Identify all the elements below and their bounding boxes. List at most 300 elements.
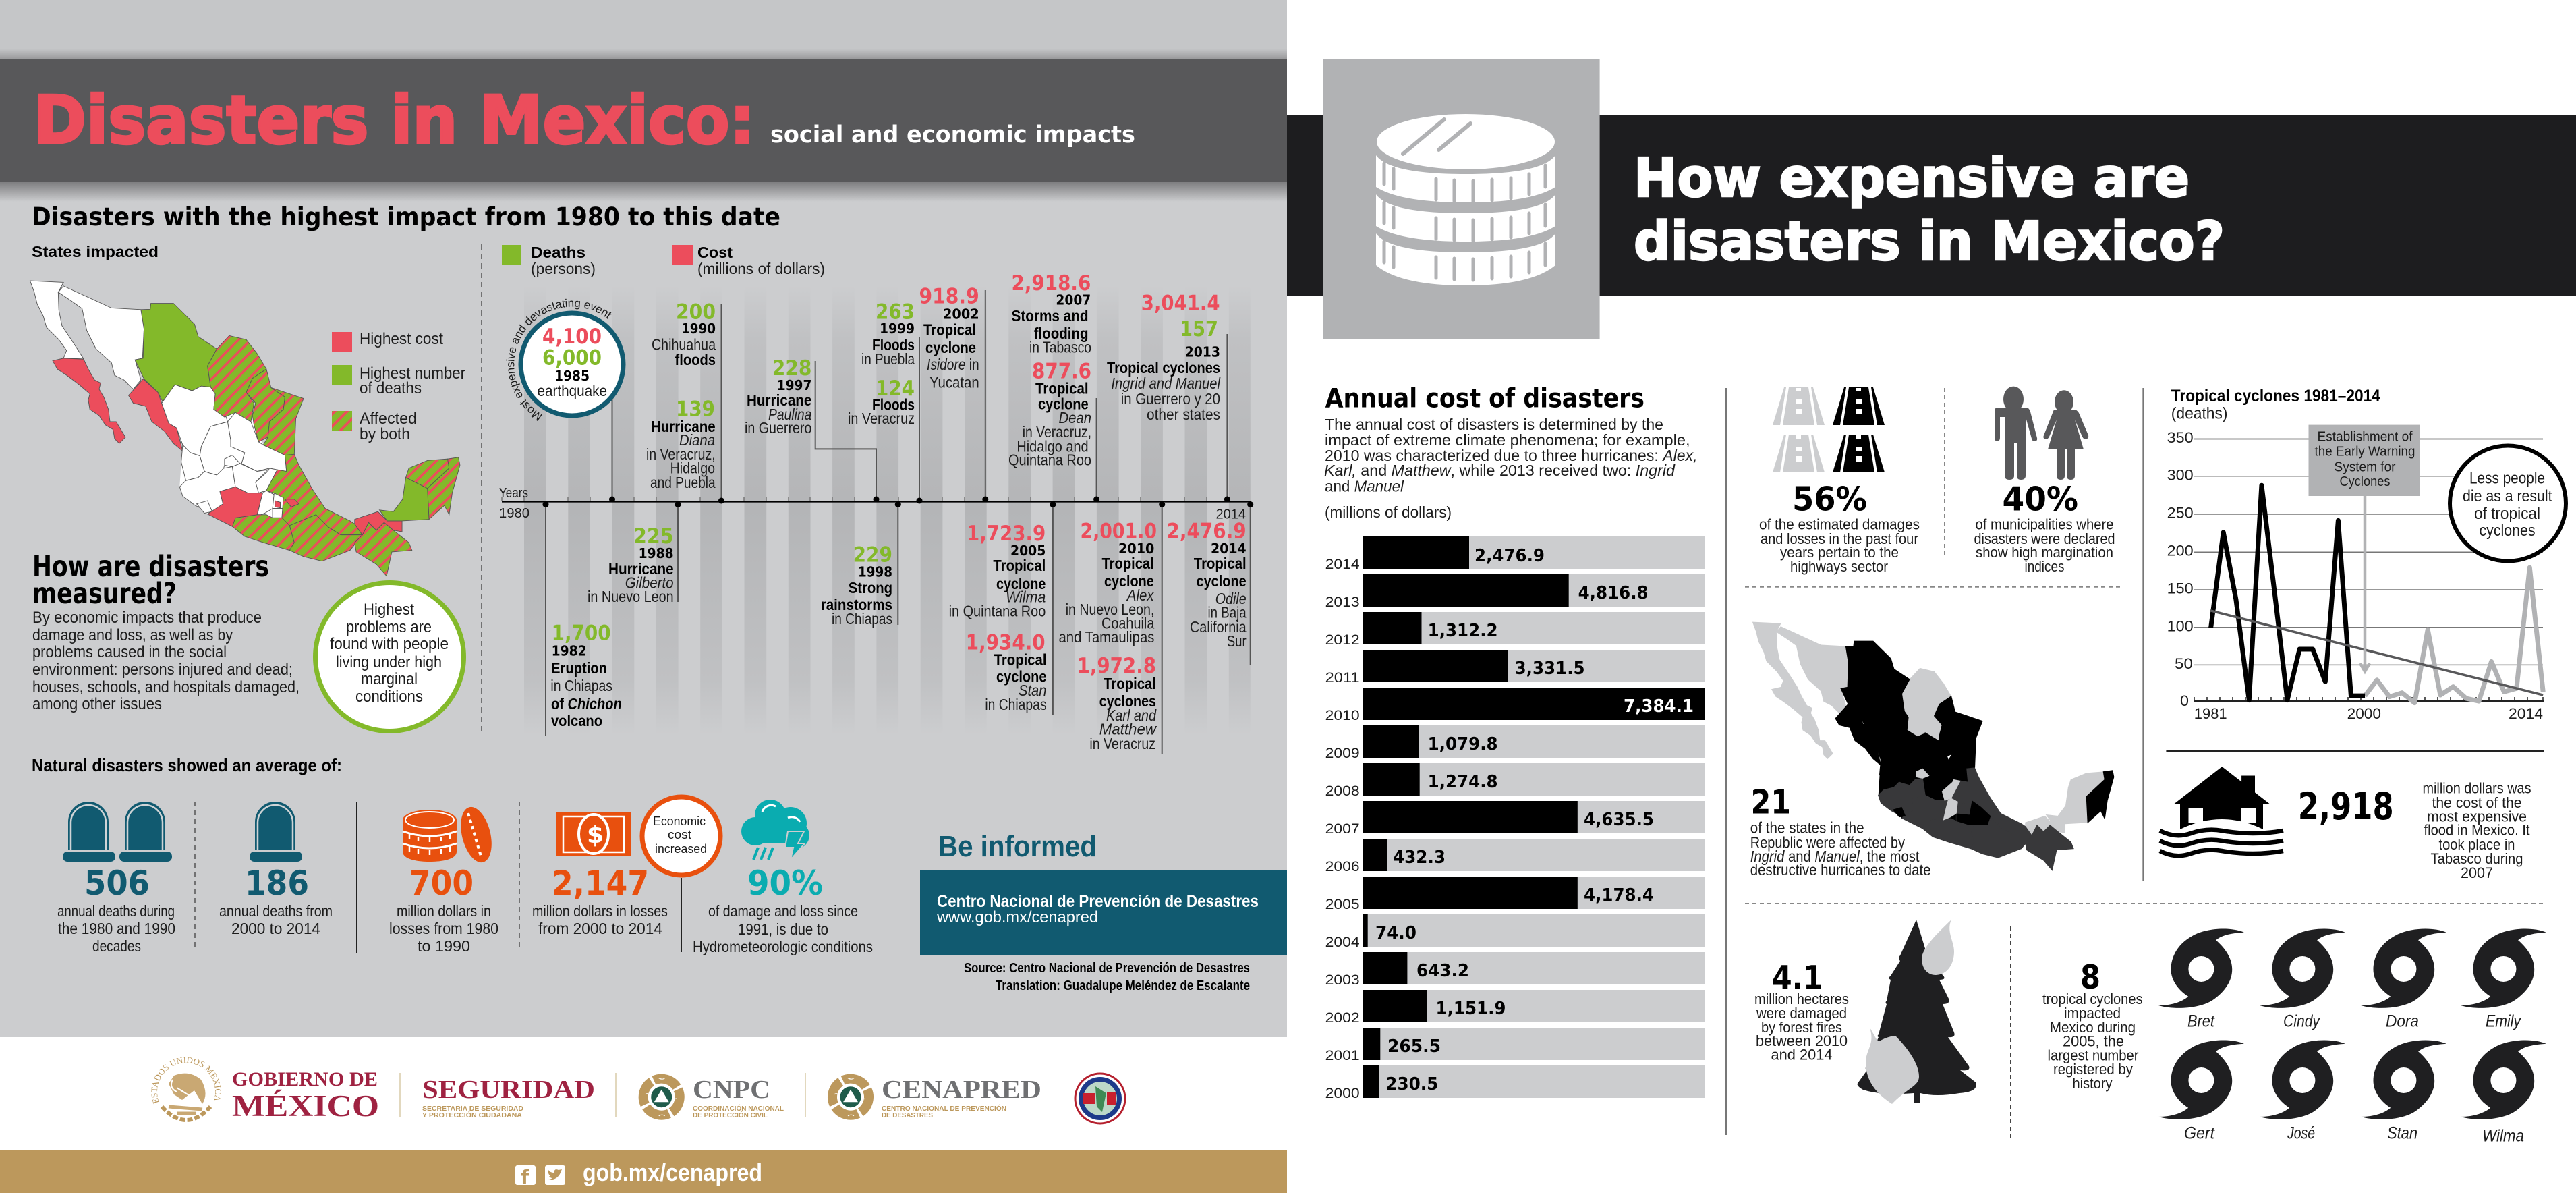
stat: 506 annual deaths: decades bbox=[92, 937, 141, 955]
event: 1988 Hurricane Gilberto: 225 bbox=[633, 524, 674, 549]
timeline legend: (persons) bbox=[531, 260, 596, 277]
event: 1985 earthquake: 1985 bbox=[554, 368, 590, 384]
event: 1988 Hurricane Gilberto: Gilberto bbox=[625, 574, 674, 591]
event: Karl and Matthew: in Veracruz bbox=[1089, 735, 1155, 752]
bar chart: annual cost: 3,331.5 bbox=[1515, 659, 1585, 679]
event: 1997 Hurricane Paulina bbox=[745, 356, 811, 437]
stat: 90% hydrometeorologic: 1991, is due to bbox=[738, 920, 828, 938]
event: 1998 rainstorms Chiapas: 229 bbox=[853, 543, 892, 567]
callout: less people die: cyclones bbox=[2480, 522, 2535, 540]
bar chart: annual cost: 2009 bbox=[1325, 746, 1360, 761]
stat: 700 million dollars: million dollars in bbox=[397, 902, 491, 920]
bar chart: annual cost: 230.5 bbox=[1385, 1074, 1438, 1094]
icons: named cyclones: Dora bbox=[2386, 1012, 2419, 1031]
event: 1997 Hurricane Paulina: 1997 bbox=[777, 377, 811, 393]
logo: Gobierno de Mexico bbox=[151, 1057, 379, 1123]
section heading: Disasters with the highest impact from 1980 to this date bbox=[32, 202, 780, 231]
stat: 21 states: 21 bbox=[1751, 783, 1791, 821]
stat: flood house 2,918: flood in Mexico. It bbox=[2424, 822, 2529, 839]
stat: 186 annual deaths: 186 bbox=[245, 864, 309, 903]
event: 2014 Odile: cyclone bbox=[1197, 572, 1247, 590]
logo: Seguridad bbox=[422, 1076, 595, 1119]
stat: 8 tropical cyclones bbox=[2042, 958, 2143, 1092]
bar chart: annual cost: 2007 bbox=[1325, 821, 1360, 837]
event: 2010 Alex: Alex bbox=[1126, 586, 1155, 604]
logo: CNPC bbox=[637, 1073, 784, 1121]
map: states impacted bbox=[30, 281, 460, 576]
event: 1985 earthquake: Most expensive and devastating event bbox=[506, 298, 611, 421]
annual cost paragraph: impact of extreme climate phenomena; for example, bbox=[1325, 431, 1690, 449]
annual cost paragraph: The annual cost of disasters is determined by the bbox=[1325, 416, 1663, 433]
annual cost paragraph: and Manuel bbox=[1325, 477, 1404, 495]
icons: named cyclones: José bbox=[2287, 1124, 2315, 1143]
chart: tropical cyclones deaths: 200 bbox=[2167, 543, 2194, 559]
event: 2014 Odile: 2014 bbox=[1211, 540, 1247, 557]
event: Karl and Matthew: Matthew bbox=[1099, 721, 1157, 738]
stat: 506 annual deaths: the 1980 and 1990 bbox=[58, 920, 175, 937]
event: 2010 Alex: Coahuila bbox=[1101, 615, 1155, 632]
event: 2014 Odile: Odile bbox=[1215, 590, 1247, 607]
bar chart: annual cost: 2002 bbox=[1325, 1010, 1360, 1026]
header band bbox=[0, 59, 1287, 182]
stat: 2,147 million dollars: $ bbox=[587, 821, 604, 849]
icons: named cyclones: Wilma bbox=[2482, 1127, 2524, 1146]
logo: CNPC: CNPC bbox=[693, 1076, 770, 1104]
stat: 90% hydrometeorologic: of damage and loss since bbox=[708, 902, 858, 920]
logo: Gobierno de Mexico: MÉXICO bbox=[232, 1089, 379, 1123]
bar chart: annual cost: 1,151.9 bbox=[1435, 999, 1506, 1019]
stat: 506 annual deaths: 506 bbox=[84, 864, 150, 903]
map legend: of deaths bbox=[360, 379, 422, 397]
stat: 56% highways: highways sector bbox=[1790, 558, 1888, 575]
stat: 186 annual deaths bbox=[219, 802, 333, 937]
stat: 56% highways bbox=[1759, 387, 1920, 575]
event: 1982 Chichon eruption bbox=[550, 621, 622, 729]
event: 2013 Ingrid and Manuel bbox=[1107, 292, 1221, 423]
event: Dean: Tropical bbox=[1035, 380, 1089, 397]
stat: 21 states: of the states in the bbox=[1750, 819, 1864, 837]
chart: tropical cyclones deaths: 350 bbox=[2167, 429, 2194, 446]
stat: 21 states bbox=[1750, 783, 1930, 879]
logo: CNPC: COORDINACIÓN NACIONAL bbox=[693, 1104, 784, 1113]
subtitle: social and economic impacts bbox=[770, 121, 1135, 148]
callout: highest problems: Highest bbox=[364, 601, 414, 619]
icons: named cyclones: Emily bbox=[2486, 1012, 2521, 1031]
icon: facebook: f bbox=[521, 1166, 529, 1188]
callout: early warning system bbox=[2308, 425, 2420, 496]
annual cost paragraph: (millions of dollars) bbox=[1325, 503, 1452, 521]
how are disasters measured: By economic impacts that produce bbox=[32, 609, 262, 627]
event: 2010 Alex: Tropical bbox=[1102, 555, 1154, 572]
bar chart: annual cost: 4,816.8 bbox=[1578, 583, 1649, 603]
stat: 4.1 million hectares: between 2010 bbox=[1756, 1032, 1848, 1049]
event: 2014 Odile: 2,476.9 bbox=[1167, 520, 1247, 544]
bar chart: annual cost: 7,384.1 bbox=[1624, 696, 1694, 717]
event: Hurricane Diana: and Puebla bbox=[650, 474, 716, 491]
callout: highest problems bbox=[316, 583, 464, 731]
icon panel: coin stack bbox=[1323, 59, 1600, 339]
bar chart: annual cost: 432.3 bbox=[1393, 848, 1446, 868]
event: 1999 floods in Puebla: in Puebla bbox=[861, 350, 915, 368]
bar chart: annual cost: 2011 bbox=[1325, 670, 1360, 686]
event: 1982 Chichon eruption: 1982 bbox=[552, 643, 587, 659]
stat: 2,147 million dollars: from 2000 to 2014 bbox=[538, 920, 662, 937]
bar chart: annual cost bbox=[1325, 536, 1705, 1101]
chart: tropical cyclones deaths bbox=[2167, 387, 2566, 722]
event: 1998 rainstorms Chiapas: in Chiapas bbox=[832, 610, 892, 628]
timeline legend: Cost bbox=[697, 244, 733, 261]
bar chart: annual cost: 4,635.5 bbox=[1584, 810, 1654, 830]
bar chart: annual cost: 2004 bbox=[1325, 935, 1360, 950]
stat: 4.1 million hectares bbox=[1754, 959, 1849, 1063]
event: 1998 rainstorms Chiapas: rainstorms bbox=[821, 596, 892, 613]
stat: 4.1 million hectares: and 2014 bbox=[1771, 1047, 1832, 1063]
event: floods in Veracruz bbox=[848, 377, 915, 427]
bar chart: annual cost: 2003 bbox=[1325, 972, 1360, 988]
event: 2005 Wilma: Wilma bbox=[1006, 588, 1046, 606]
stat: flood house 2,918: 2007 bbox=[2461, 864, 2493, 881]
bar chart: annual cost: 4,178.4 bbox=[1584, 885, 1654, 906]
stat: 56% highways: years pertain to the bbox=[1780, 544, 1899, 561]
bar chart: annual cost: 2006 bbox=[1325, 859, 1360, 875]
event: floods in Veracruz: in Veracruz bbox=[848, 410, 915, 427]
averages heading: Natural disasters showed an average of: bbox=[32, 755, 342, 775]
stat: 700 million dollars: losses from 1980 bbox=[389, 920, 498, 937]
event: 2005 Wilma: cyclone bbox=[996, 575, 1046, 592]
event: 2013 Ingrid and Manuel: in Guerrero y 20 bbox=[1121, 390, 1220, 408]
event: 2010 Alex: cyclone bbox=[1104, 572, 1154, 590]
footer logos strip bbox=[0, 1037, 1287, 1150]
event: 1982 Chichon eruption: volcano bbox=[551, 712, 602, 729]
event: 1997 Hurricane Paulina: Hurricane bbox=[747, 391, 811, 409]
right title: How expensive are bbox=[1634, 147, 2189, 209]
event: 2010 Alex: 2,001.0 bbox=[1081, 520, 1157, 544]
callout: early warning system: Cyclones bbox=[2339, 474, 2391, 489]
event: 1988 Hurricane Gilberto: in Nuevo Leon bbox=[588, 588, 674, 605]
event: 1990 Chihuahua floods: Chihuahua bbox=[652, 336, 716, 354]
bar chart: annual cost: 74.0 bbox=[1375, 923, 1416, 943]
callout: economic cost increased: Economic bbox=[653, 814, 706, 828]
right title: disasters in Mexico? bbox=[1634, 211, 2225, 273]
logo: Seguridad: Y PROTECCIÓN CIUDADANA bbox=[422, 1111, 522, 1119]
be informed box: www.gob.mx/cenapred bbox=[936, 908, 1098, 926]
event: 1990 Chihuahua floods: 200 bbox=[676, 300, 716, 324]
event: 2013 Ingrid and Manuel: 2013 bbox=[1185, 344, 1220, 360]
event: 1988 Hurricane Gilberto: 1988 bbox=[639, 545, 674, 561]
callout: less people die: die as a result bbox=[2463, 487, 2552, 505]
event: 2002 Isidore bbox=[919, 285, 979, 391]
callout: less people die: of tropical bbox=[2474, 505, 2540, 523]
event: Hurricane Diana: Hurricane bbox=[651, 418, 716, 435]
stat: 8 tropical cyclones: Mexico during bbox=[2050, 1019, 2136, 1036]
logo: CENAPRED bbox=[826, 1073, 1041, 1121]
bar chart: annual cost: 2014 bbox=[1325, 557, 1360, 572]
chart: tropical cyclones deaths: 50 bbox=[2175, 655, 2193, 672]
event: 1985 earthquake: 4,100 bbox=[542, 325, 602, 349]
event: 2007 Tabasco storms: flooding bbox=[1034, 325, 1089, 342]
event: 1997 Hurricane Paulina: in Guerrero bbox=[745, 419, 811, 437]
stat: flood house 2,918: took place in bbox=[2439, 836, 2515, 853]
event: 1982 Chichon eruption: in Chiapas bbox=[550, 677, 612, 694]
stat: 21 states: Republic were affected by bbox=[1750, 834, 1905, 852]
bar chart: annual cost: 1,274.8 bbox=[1428, 772, 1498, 792]
annual cost paragraph bbox=[1324, 416, 1698, 521]
stat: 40% municipalities: disasters were declared bbox=[1974, 530, 2115, 547]
stat: 40% municipalities bbox=[1974, 387, 2115, 575]
event: 2014 Odile: Tropical bbox=[1194, 555, 1247, 572]
annual cost paragraph: Karl, and Matthew, while 2013 received two: Ingrid bbox=[1324, 462, 1676, 479]
event: Dean bbox=[1008, 360, 1091, 468]
stat: 186 annual deaths: annual deaths from bbox=[219, 902, 333, 920]
stat: flood house 2,918: Tabasco during bbox=[2431, 850, 2523, 867]
event: 2005 Wilma: 2005 bbox=[1010, 543, 1046, 559]
icons: named cyclones: Cindy bbox=[2283, 1012, 2320, 1031]
icon: burning tree bbox=[1858, 920, 1976, 1104]
bar chart: annual cost: 2,476.9 bbox=[1475, 546, 1545, 566]
event: Stan: Tropical bbox=[994, 650, 1047, 668]
callout: economic cost increased bbox=[642, 797, 720, 875]
event: 2002 Isidore: Yucatan bbox=[929, 374, 979, 391]
annual cost paragraph: 2010 was characterized due to three hurricanes: Alex, bbox=[1325, 447, 1698, 464]
bar chart: annual cost: 643.2 bbox=[1416, 961, 1469, 981]
stat: 506 annual deaths: annual deaths during bbox=[57, 902, 175, 920]
logo: round seal bbox=[1075, 1074, 1125, 1123]
event: floods in Veracruz: 124 bbox=[876, 377, 915, 401]
left panel background bbox=[0, 0, 1287, 1037]
how are disasters measured: measured? bbox=[32, 577, 177, 611]
stat: 40% municipalities: 40% bbox=[2002, 480, 2078, 518]
map legend: Affected bbox=[360, 410, 417, 428]
stat: 21 states: Ingrid and Manuel, the most bbox=[1750, 848, 1920, 865]
stat: 700 million dollars: to 1990 bbox=[418, 937, 470, 955]
stat: 2,147 million dollars: 2,147 bbox=[552, 864, 649, 903]
event: 1999 floods in Puebla: 263 bbox=[876, 300, 915, 324]
callout: highest problems: found with people bbox=[330, 635, 449, 653]
stat: 4.1 million hectares: were damaged bbox=[1756, 1005, 1847, 1022]
stat: 90% hydrometeorologic: 90% bbox=[747, 864, 823, 903]
event: 1982 Chichon eruption: 1,700 bbox=[552, 621, 611, 646]
event: 2010 Alex: 2010 bbox=[1118, 540, 1154, 557]
event: Stan: in Chiapas bbox=[985, 696, 1047, 713]
event: Dean: Dean bbox=[1059, 409, 1091, 426]
event: 1997 Hurricane Paulina: Paulina bbox=[768, 406, 811, 423]
how are disasters measured: How are disasters bbox=[32, 550, 269, 584]
event: Dean: Quintana Roo bbox=[1008, 451, 1091, 468]
stat: 8 tropical cyclones: history bbox=[2072, 1075, 2113, 1092]
event: Hurricane Diana: 139 bbox=[676, 397, 715, 422]
be informed box: Centro Nacional de Prevención de Desastres bbox=[937, 892, 1259, 911]
icon: twitter bbox=[545, 1165, 565, 1185]
event: 1998 rainstorms Chiapas: 1998 bbox=[858, 564, 892, 580]
event: Karl and Matthew: Tropical bbox=[1104, 675, 1156, 692]
timeline legend: (millions of dollars) bbox=[697, 260, 825, 277]
chart: tropical cyclones deaths: 2014 bbox=[2509, 705, 2543, 722]
states impacted heading: States impacted bbox=[32, 243, 159, 260]
event: 1990 Chihuahua floods: 1990 bbox=[681, 321, 716, 337]
bar chart: annual cost: 2013 bbox=[1325, 594, 1360, 610]
icons: named cyclones: Bret bbox=[2187, 1012, 2215, 1031]
stat: 8 tropical cyclones: tropical cyclones bbox=[2042, 991, 2143, 1007]
event: 1990 Chihuahua floods bbox=[652, 300, 716, 368]
timeline legend bbox=[502, 244, 825, 277]
source note: Source: Centro Nacional de Prevención de Desastres bbox=[964, 961, 1250, 976]
event: 2007 Tabasco storms: Storms and bbox=[1012, 307, 1089, 325]
timeline connector lines and dots bbox=[542, 290, 1253, 754]
icons: named cyclones: Gert bbox=[2184, 1124, 2215, 1143]
event: 1998 rainstorms Chiapas bbox=[821, 543, 892, 628]
event: 2007 Tabasco storms: in Tabasco bbox=[1029, 339, 1091, 356]
stat: 40% municipalities: of municipalities where bbox=[1975, 516, 2114, 533]
logo: Gobierno de Mexico: ESTADOS UNIDOS MEXICANOS bbox=[151, 1057, 221, 1104]
stat: 4.1 million hectares: by forest fires bbox=[1761, 1019, 1842, 1036]
bar chart: annual cost: 1,312.2 bbox=[1428, 621, 1498, 641]
chart: tropical cyclones deaths: 150 bbox=[2167, 580, 2194, 596]
event: 2014 Odile: California bbox=[1190, 618, 1247, 636]
timeline stripes and axis bbox=[499, 285, 1251, 735]
event: 2002 Isidore: cyclone bbox=[925, 339, 976, 356]
how are disasters measured bbox=[32, 550, 299, 713]
bar chart: annual cost: 265.5 bbox=[1387, 1036, 1441, 1057]
footer gold bar bbox=[0, 1150, 1287, 1193]
stat: 8 tropical cyclones: 2005, the bbox=[2063, 1033, 2124, 1050]
right title bbox=[1634, 147, 2225, 273]
event: 2010 Alex: and Tamaulipas bbox=[1059, 628, 1154, 646]
event: 2010 Alex: in Nuevo Leon, bbox=[1066, 601, 1154, 618]
event: 2014 Odile: in Baja bbox=[1207, 604, 1247, 621]
event: 2013 Ingrid and Manuel: Tropical cyclones bbox=[1107, 359, 1220, 377]
how are disasters measured: environment: persons injured and dead; bbox=[32, 661, 293, 679]
event: 2013 Ingrid and Manuel: 3,041.4 bbox=[1141, 292, 1220, 316]
callout: early warning system: Establishment of bbox=[2318, 429, 2413, 444]
bar chart: annual cost: 2000 bbox=[1325, 1086, 1360, 1101]
event: 2007 Tabasco storms: 2,918.6 bbox=[1012, 271, 1091, 296]
event: Stan: cyclone bbox=[996, 668, 1047, 686]
event: 1985 earthquake: earthquake bbox=[537, 382, 607, 399]
timeline stripes and axis: 2014 bbox=[1215, 507, 1246, 522]
stat: flood house 2,918: million dollars was bbox=[2423, 779, 2531, 796]
logo: CENAPRED: DE DESASTRES bbox=[882, 1112, 933, 1119]
event: Karl and Matthew: 1,972.8 bbox=[1077, 654, 1156, 678]
event: 2013 Ingrid and Manuel: other states bbox=[1147, 406, 1220, 423]
event: 2005 Wilma: Tropical bbox=[993, 557, 1046, 574]
callout: highest problems: living under high bbox=[336, 653, 442, 671]
how are disasters measured: problems caused in the social bbox=[32, 643, 227, 661]
right header black band bbox=[1287, 115, 2576, 296]
event: 2005 Wilma: in Quintana Roo bbox=[949, 602, 1046, 619]
title: Disasters in Mexico: bbox=[34, 82, 755, 159]
map legend: Highest cost bbox=[360, 330, 443, 348]
stat: 2,147 million dollars: million dollars in losses bbox=[532, 902, 668, 920]
event: 1982 Chichon eruption: Eruption bbox=[551, 659, 607, 677]
icons: named cyclones bbox=[2158, 928, 2546, 1146]
logo: CENAPRED: CENAPRED bbox=[882, 1076, 1041, 1104]
event: 2005 Wilma: 1,723.9 bbox=[967, 522, 1046, 546]
event: 2002 Isidore: 2002 bbox=[943, 306, 979, 323]
event: Dean: cyclone bbox=[1038, 395, 1089, 413]
chart: tropical cyclones deaths: 0 bbox=[2180, 692, 2189, 709]
event: Hurricane Diana bbox=[646, 397, 716, 491]
event: Stan bbox=[966, 630, 1047, 713]
bar chart: annual cost: 2008 bbox=[1325, 783, 1360, 799]
chart: tropical cyclones deaths: 250 bbox=[2167, 505, 2194, 521]
event: 2010 Alex bbox=[1059, 520, 1157, 646]
callout: early warning system: the Early Warning bbox=[2315, 444, 2415, 459]
chart: tropical cyclones deaths: Tropical cyclones 1981–2014 bbox=[2171, 387, 2380, 406]
event: 1999 floods in Puebla: 1999 bbox=[880, 321, 915, 337]
stat: 700 million dollars bbox=[389, 804, 498, 955]
event: 2002 Isidore: Isidore in bbox=[927, 356, 979, 373]
stat: 56% highways: of the estimated damages bbox=[1759, 516, 1920, 533]
map legend bbox=[332, 330, 465, 443]
event: Stan: Stan bbox=[1019, 682, 1047, 699]
timeline legend: Deaths bbox=[531, 244, 585, 261]
event: 2013 Ingrid and Manuel: Ingrid and Manuel bbox=[1111, 374, 1221, 392]
event: Dean: in Veracruz, bbox=[1023, 423, 1091, 441]
event: 1988 Hurricane Gilberto bbox=[588, 524, 674, 605]
stat: 56% highways: and losses in the past four bbox=[1761, 530, 1918, 547]
stat: 700 million dollars: 700 bbox=[409, 864, 474, 903]
be informed box bbox=[920, 870, 1287, 955]
stat: flood house 2,918 bbox=[2160, 767, 2531, 881]
bar chart: annual cost: 2012 bbox=[1325, 632, 1360, 648]
stat: flood house 2,918: 2,918 bbox=[2298, 785, 2394, 828]
event: 1985 earthquake: 6,000 bbox=[542, 345, 602, 370]
how are disasters measured: among other issues bbox=[32, 695, 162, 713]
bar chart: annual cost: 1,079.8 bbox=[1428, 734, 1498, 754]
source note bbox=[964, 961, 1250, 993]
event: Karl and Matthew: Karl and bbox=[1106, 706, 1157, 724]
chart: tropical cyclones deaths: (deaths) bbox=[2171, 405, 2227, 423]
event: 1988 Hurricane Gilberto: Hurricane bbox=[608, 560, 674, 578]
event: Hurricane Diana: Hidalgo bbox=[670, 460, 715, 477]
event: Stan: 1,934.0 bbox=[966, 630, 1046, 655]
map: Ingrid and Manuel affected states bbox=[1752, 622, 2114, 870]
stat: 186 annual deaths: 2000 to 2014 bbox=[231, 920, 320, 937]
event: 2007 Tabasco storms: 2007 bbox=[1056, 292, 1091, 308]
callout: highest problems: problems are bbox=[346, 618, 432, 636]
map legend: Highest number bbox=[360, 364, 465, 383]
stat: 90% hydrometeorologic: Hydrometeorologic conditions bbox=[693, 938, 873, 955]
chart: tropical cyclones deaths: 100 bbox=[2167, 618, 2194, 635]
stat: flood house 2,918: most expensive bbox=[2427, 808, 2527, 825]
callout: less people die: Less people bbox=[2469, 469, 2545, 487]
event: 2014 Odile: Sur bbox=[1227, 632, 1247, 650]
event: Dean: Hidalgo and bbox=[1017, 437, 1089, 455]
logo: Gobierno de Mexico: GOBIERNO DE bbox=[232, 1068, 378, 1090]
logo: Seguridad: SEGURIDAD bbox=[422, 1076, 595, 1104]
stat: 21 states: destructive hurricanes to date bbox=[1750, 861, 1930, 879]
event: floods in Veracruz: Floods bbox=[872, 395, 915, 413]
event: 2014 Odile bbox=[1167, 520, 1247, 650]
callout: early warning system: System for bbox=[2334, 460, 2396, 474]
icon: facebook bbox=[515, 1165, 536, 1188]
annual cost heading: Annual cost of disasters bbox=[1325, 383, 1644, 414]
stat: 4.1 million hectares: 4.1 bbox=[1772, 959, 1823, 997]
stat: 56% highways: 56% bbox=[1792, 480, 1867, 518]
callout: highest problems: conditions bbox=[355, 688, 423, 706]
stat: 8 tropical cyclones: 8 bbox=[2080, 958, 2100, 997]
event: 1990 Chihuahua floods: floods bbox=[675, 351, 716, 368]
event: 2007 Tabasco storms bbox=[1012, 271, 1091, 356]
callout: less people die bbox=[2450, 445, 2566, 561]
stat: 4.1 million hectares: million hectares bbox=[1754, 991, 1849, 1007]
event: Hurricane Diana: in Veracruz, bbox=[646, 445, 716, 463]
event: Dean: 877.6 bbox=[1032, 360, 1091, 384]
callout: economic cost increased: cost bbox=[668, 828, 691, 841]
footer gold bar: gob.mx/cenapred bbox=[583, 1159, 762, 1186]
bar chart: annual cost: 2010 bbox=[1325, 708, 1360, 723]
stat: 40% municipalities: indices bbox=[2025, 558, 2064, 575]
